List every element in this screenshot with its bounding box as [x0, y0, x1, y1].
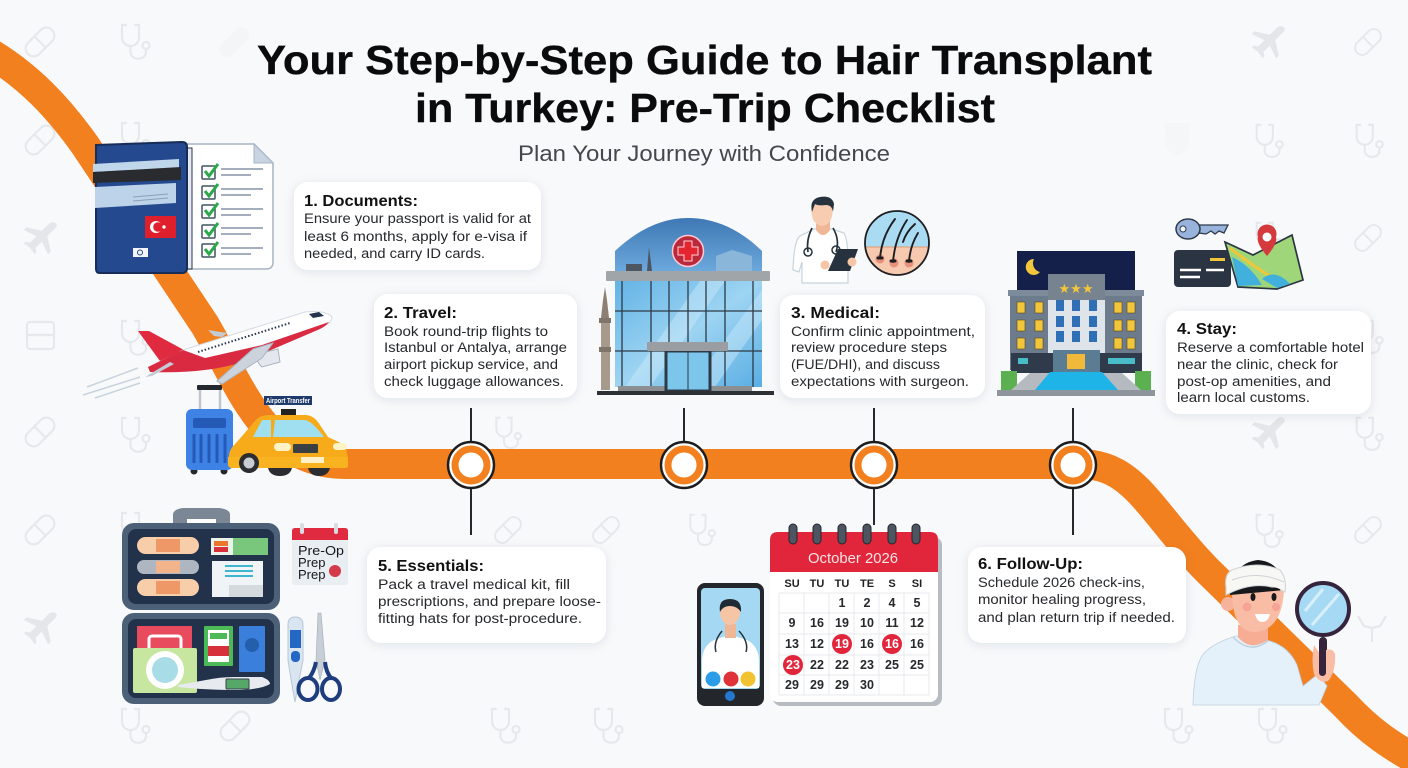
- calendar: October 2026: 5: [914, 596, 921, 610]
- calendar: October 2026: 1: [839, 596, 846, 610]
- calendar: October 2026: TU: [810, 578, 824, 590]
- card 6: follow-up: 6. Follow-Up:: [978, 556, 1083, 573]
- card 2: travel: [374, 294, 577, 398]
- icon: doctor with tablet: [793, 197, 858, 283]
- card 4: stay: [1166, 311, 1371, 414]
- card 1: documents: needed, and carry ID cards.: [304, 246, 485, 261]
- node 4: [1050, 442, 1096, 488]
- calendar: October 2026: 29: [785, 678, 799, 692]
- calendar: October 2026: 30: [860, 678, 874, 692]
- calendar: October 2026: 25: [885, 658, 899, 672]
- calendar: October 2026: 23: [786, 658, 800, 672]
- icon: blue suitcase: [186, 385, 233, 474]
- icon: pre-op prep note: Pre-Op: [298, 543, 344, 558]
- card 1: documents: [294, 182, 541, 270]
- card 6: follow-up: monitor healing progress,: [978, 592, 1146, 607]
- card 3: medical: expectations with surgeon.: [791, 374, 969, 389]
- icon: hotel building: [997, 251, 1155, 396]
- title: Your Step-by-Step Guide to Hair Transplant: [257, 37, 1152, 83]
- calendar: October 2026: [770, 524, 942, 706]
- calendar: October 2026: 16: [810, 616, 824, 630]
- card 6: follow-up: and plan return trip if needed.: [978, 610, 1175, 625]
- calendar: October 2026: 22: [810, 658, 824, 672]
- node 3: [851, 442, 897, 488]
- subtitle: Plan Your Journey with Confidence: [518, 141, 890, 166]
- icon: smartphone video call with doctor: [697, 583, 764, 706]
- calendar: October 2026: 16: [910, 637, 924, 651]
- card 4: stay: 4. Stay:: [1177, 321, 1237, 338]
- icon: medical travel kit: [122, 508, 280, 704]
- card 1: documents: Ensure your passport is valid for at: [304, 211, 531, 226]
- card 5: essentials: fitting hats for post-procedure.: [378, 611, 582, 626]
- icon: yellow airport taxi: Airport Transfer: [266, 398, 310, 405]
- icon: hotel building: ★★★: [1059, 281, 1093, 296]
- icon: clinic building: [597, 218, 774, 395]
- title: [257, 37, 1152, 131]
- calendar: October 2026: 4: [889, 596, 896, 610]
- card 3: medical: Confirm clinic appointment,: [791, 324, 975, 339]
- card 6: follow-up: Schedule 2026 check-ins,: [978, 575, 1145, 590]
- card 2: travel: check luggage allowances.: [384, 374, 564, 389]
- calendar: October 2026: 22: [835, 658, 849, 672]
- calendar: October 2026: TU: [835, 578, 849, 590]
- card 4: stay: Reserve a comfortable hotel: [1177, 340, 1364, 355]
- calendar: October 2026: 19: [835, 637, 849, 651]
- icon: digital thermometer: [288, 617, 303, 702]
- card 2: travel: Istanbul or Antalya, arrange: [384, 340, 567, 355]
- icon: key, key card and map: [1174, 219, 1303, 289]
- icon: pre-op prep note: Prep: [298, 555, 325, 570]
- icon: yellow airport taxi: [228, 396, 348, 476]
- card 3: medical: (FUE/DHI), and discuss: [791, 357, 940, 372]
- calendar: October 2026: SI: [912, 578, 922, 590]
- card 2: travel: airport pickup service, and: [384, 357, 558, 372]
- calendar: October 2026: 16: [860, 637, 874, 651]
- calendar: October 2026: 29: [835, 678, 849, 692]
- card 5: essentials: [367, 547, 606, 643]
- title: in Turkey: Pre-Trip Checklist: [415, 85, 995, 131]
- node 1: [448, 442, 494, 488]
- card 2: travel: 2. Travel:: [384, 305, 457, 322]
- card 3: medical: [780, 295, 985, 398]
- calendar: October 2026: 25: [910, 658, 924, 672]
- connector lines and timeline nodes: [448, 408, 1096, 535]
- icon: hair follicle circle: [865, 211, 929, 275]
- card 4: stay: near the clinic, check for: [1177, 357, 1339, 372]
- node 2: [661, 442, 707, 488]
- calendar: October 2026: SU: [784, 578, 800, 590]
- calendar: October 2026: 19: [835, 616, 849, 630]
- card 1: documents: 1. Documents:: [304, 193, 418, 210]
- calendar: October 2026: 13: [785, 637, 799, 651]
- illustration: smiling patient with bandage and mirror: [1193, 560, 1349, 705]
- calendar: October 2026: October 2026: [808, 551, 898, 567]
- card 5: essentials: prescriptions, and prepare loose-: [378, 594, 601, 609]
- calendar: October 2026: 11: [885, 616, 899, 630]
- calendar: October 2026: TE: [860, 578, 874, 590]
- calendar: October 2026: 9: [789, 616, 796, 630]
- card 5: essentials: 5. Essentials:: [378, 558, 484, 575]
- card 5: essentials: Pack a travel medical kit, fill: [378, 577, 570, 592]
- card 3: medical: 3. Medical:: [791, 305, 880, 322]
- calendar: October 2026: 10: [860, 616, 874, 630]
- calendar: October 2026: 2: [864, 596, 871, 610]
- card 6: follow-up: [968, 547, 1186, 643]
- icon: passport and checklist: [93, 142, 273, 273]
- card 1: documents: least 6 months, apply for e-visa if: [304, 229, 527, 244]
- calendar: October 2026: 23: [860, 658, 874, 672]
- card 3: medical: review procedure steps: [791, 340, 947, 355]
- calendar: October 2026: 12: [810, 637, 824, 651]
- calendar: October 2026: 29: [810, 678, 824, 692]
- calendar: October 2026: 12: [910, 616, 924, 630]
- icon: pre-op prep note: Prep: [298, 567, 325, 582]
- card 4: stay: post-op amenities, and: [1177, 374, 1331, 389]
- calendar: October 2026: S: [888, 578, 896, 590]
- calendar: October 2026: 16: [885, 637, 899, 651]
- card 2: travel: Book round-trip flights to: [384, 324, 548, 339]
- icon: scissors: [298, 613, 340, 700]
- icon: pre-op prep note: [292, 523, 348, 585]
- icon: airplane: [83, 312, 332, 398]
- card 4: stay: learn local customs.: [1177, 390, 1310, 405]
